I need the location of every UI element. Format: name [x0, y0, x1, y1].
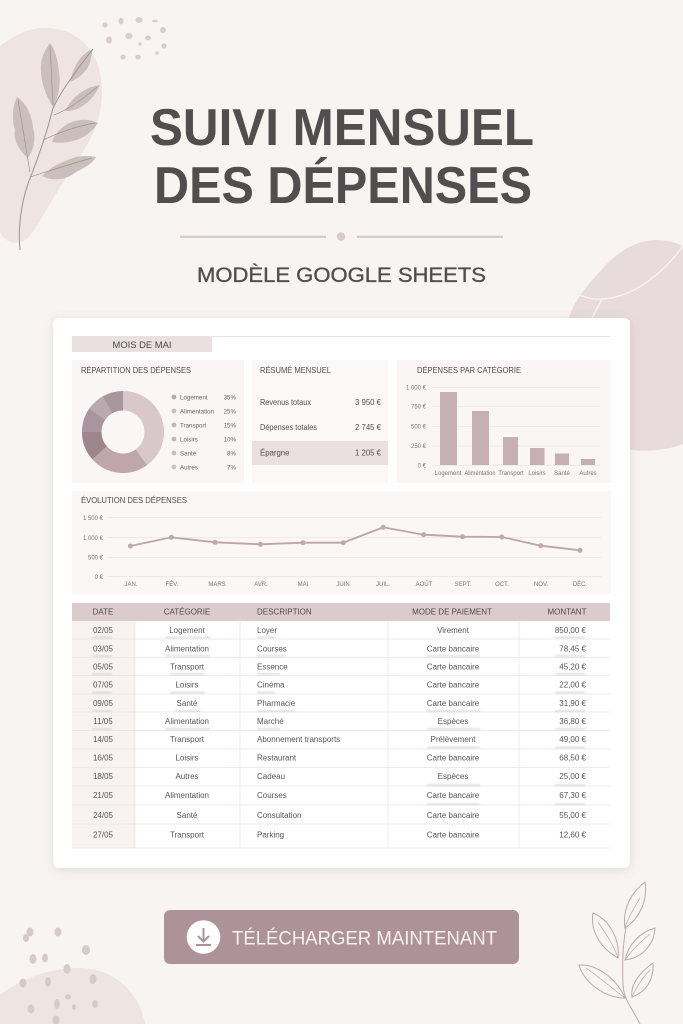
blob: top left — [0, 28, 102, 243]
months: AVR. — [254, 582, 268, 588]
axis labels: 0 € — [418, 464, 427, 470]
panel: résumé mensuel: 3 950 € — [355, 398, 382, 407]
table rows: 11/05 — [93, 717, 113, 726]
table header — [72, 603, 610, 621]
y axis: 1 500 € — [83, 516, 104, 522]
legend: Logement — [180, 394, 208, 402]
months: FÉV. — [166, 581, 179, 588]
table rows: Espèces — [438, 717, 468, 726]
table rows: 55,00 € — [559, 811, 587, 820]
bar labels: Transport — [498, 471, 524, 477]
table rows: 03/05 — [93, 644, 114, 654]
legend: Santé — [180, 450, 197, 458]
y axis — [83, 516, 104, 581]
table rows: Marché — [257, 717, 284, 726]
table rows: 22,00 € — [559, 680, 587, 690]
line chart — [128, 525, 582, 553]
table rows: 49,00 € — [559, 735, 587, 744]
axis labels: 250 € — [411, 444, 427, 450]
table rows: 18/05 — [93, 772, 114, 781]
table header: DESCRIPTION — [257, 608, 312, 616]
table rows: Pharmacie — [257, 699, 296, 708]
icon: bottom-right leaf outline — [579, 882, 655, 1024]
table rows: Espèces — [438, 772, 468, 781]
panel: résumé mensuel: RÉSUMÉ MENSUEL — [260, 366, 332, 375]
legend: 15% — [224, 422, 236, 430]
table rows: 09/05 — [93, 699, 114, 708]
bars — [440, 392, 595, 465]
table rows: 02/05 — [93, 626, 114, 635]
table rows: 68,50 € — [559, 754, 587, 762]
donut chart — [92, 401, 154, 463]
legend: Loisirs — [180, 436, 198, 444]
table rows: 25,00 € — [559, 772, 587, 781]
table rows: Loisirs — [175, 754, 199, 762]
months: MAI — [298, 582, 309, 588]
table rows: Restaurant — [257, 754, 297, 762]
bar labels: Logement — [435, 471, 462, 477]
legend: Autres — [180, 464, 198, 472]
table rows: Alimentation — [165, 791, 209, 800]
table header: CATÉGORIE — [164, 608, 210, 616]
axis labels: 750 € — [411, 404, 427, 410]
legend: Transport — [180, 422, 207, 430]
divider — [180, 232, 503, 241]
subtitle: MODÈLE GOOGLE SHEETS — [197, 264, 486, 287]
button: télécharger maintenant: TÉLÉCHARGER MAINTENANT — [232, 928, 497, 950]
panel: résumé mensuel: 1 205 € — [355, 448, 382, 458]
months: DÉC. — [573, 581, 587, 588]
panel: résumé mensuel: 2 745 € — [355, 423, 382, 432]
table rows: 45,20 € — [559, 662, 587, 672]
table rows: 24/05 — [93, 811, 114, 820]
legend: 10% — [224, 436, 236, 444]
legend: 35% — [224, 394, 236, 402]
legend: 7% — [227, 464, 236, 472]
legend — [172, 394, 236, 472]
panel: spreadsheet card — [53, 318, 630, 868]
bar labels: Autres — [579, 471, 597, 477]
table header: MODE DE PAIEMENT — [412, 608, 492, 616]
button: télécharger maintenant — [164, 910, 519, 964]
table rows: Alimentation — [165, 717, 209, 726]
bar labels — [435, 471, 597, 477]
panel: résumé mensuel — [252, 360, 388, 483]
months: JUIL. — [376, 582, 390, 588]
blob: bottom left — [0, 968, 145, 1024]
legend: 8% — [227, 450, 236, 458]
table rows: 850,00 € — [555, 626, 587, 635]
axis labels: 1 000 € — [406, 386, 427, 392]
axis labels — [406, 386, 427, 470]
table — [72, 603, 610, 848]
panel: répartition des dépenses: RÉPARTITION DES DÉPENSES — [81, 366, 191, 375]
table header: MONTANT — [548, 608, 587, 616]
table rows: Loyer — [257, 626, 277, 635]
table header: DATE — [93, 608, 113, 616]
months: SEPT. — [455, 582, 472, 588]
panel: répartition des dépenses — [72, 360, 244, 483]
months: JAN. — [124, 582, 138, 588]
months: NOV. — [534, 582, 548, 588]
table rows: Prélèvement — [431, 735, 476, 744]
panel: résumé mensuel: Revenus totaux — [260, 398, 311, 407]
table rows: Transport — [170, 735, 205, 744]
panel: dépenses par catégorie — [397, 360, 611, 483]
months: OCT. — [495, 582, 509, 588]
table rows: Carte bancaire — [427, 680, 480, 690]
table rows: 31,90 € — [559, 699, 587, 708]
bar labels: Alimentation — [464, 471, 496, 477]
table rows: Carte bancaire — [427, 754, 480, 762]
table rows: Transport — [170, 662, 205, 672]
table rows: Parking — [257, 830, 284, 840]
table rows: Consultation — [257, 811, 301, 820]
table rows: 21/05 — [93, 791, 114, 800]
months: MARS — [208, 582, 226, 588]
table rows: Courses — [257, 644, 287, 654]
icon: download — [187, 920, 220, 954]
smudges under rows — [92, 638, 585, 804]
month header: MOIS DE MAI — [112, 340, 172, 351]
table rows: Santé — [177, 811, 198, 820]
table rows: Carte bancaire — [427, 830, 480, 840]
panel: résumé mensuel: Épargne — [260, 448, 289, 458]
table rows: 27/05 — [93, 830, 114, 840]
months — [124, 581, 587, 588]
bar labels: Santé — [554, 471, 570, 477]
table rows: 14/05 — [93, 735, 114, 744]
y axis: 500 € — [88, 556, 104, 562]
table rows — [93, 626, 587, 840]
table rows: 16/05 — [93, 754, 114, 762]
table rows: Cinéma — [257, 680, 285, 690]
dots: top confetti — [102, 17, 167, 60]
table rows: Logement — [169, 626, 206, 635]
months: JUIN — [336, 582, 350, 588]
table rows: Transport — [170, 830, 205, 840]
months: AOÛT — [416, 581, 433, 588]
table rows: Essence — [257, 662, 288, 672]
table rows: Cadeau — [257, 772, 285, 781]
panel: dépenses par catégorie: DÉPENSES PAR CATÉGORIE — [417, 366, 521, 375]
y axis: 1 000 € — [83, 536, 104, 542]
table rows: 67,30 € — [559, 791, 587, 800]
dots: bottom left — [20, 928, 98, 1024]
legend: 25% — [224, 408, 236, 416]
table rows: Carte bancaire — [427, 662, 480, 672]
table rows: Carte bancaire — [427, 699, 480, 708]
legend: Alimentation — [180, 408, 215, 416]
table rows: 05/05 — [93, 662, 114, 672]
panel: évolution des dépenses: ÉVOLUTION DES DÉPENSES — [81, 496, 187, 505]
table rows: Carte bancaire — [427, 811, 480, 820]
table rows: Virement — [437, 626, 470, 635]
table rows: Abonnement transports — [257, 735, 340, 744]
blob: top right — [568, 240, 683, 451]
month header — [72, 336, 610, 352]
table rows: 36,80 € — [559, 717, 587, 726]
title: SUIVI MENSUEL — [150, 99, 534, 157]
title: DES DÉPENSES — [154, 157, 532, 215]
table rows: 12,60 € — [559, 830, 587, 840]
panel: résumé mensuel: Dépenses totales — [260, 423, 317, 432]
table rows: Courses — [257, 791, 287, 800]
table rows: Santé — [177, 699, 198, 708]
axis labels: 500 € — [411, 424, 427, 430]
panel: évolution des dépenses — [72, 491, 611, 594]
table rows: Carte bancaire — [427, 644, 480, 654]
table rows: 78,45 € — [559, 644, 587, 654]
bar labels: Loisirs — [528, 471, 546, 477]
icon: top-left leaf branch — [13, 43, 100, 250]
title — [150, 99, 534, 215]
table rows: Alimentation — [165, 644, 209, 654]
table rows: Carte bancaire — [427, 791, 480, 800]
table rows: Autres — [175, 772, 199, 781]
table rows: 07/05 — [93, 680, 114, 690]
table rows: Loisirs — [175, 680, 199, 690]
y axis: 0 € — [95, 575, 104, 581]
